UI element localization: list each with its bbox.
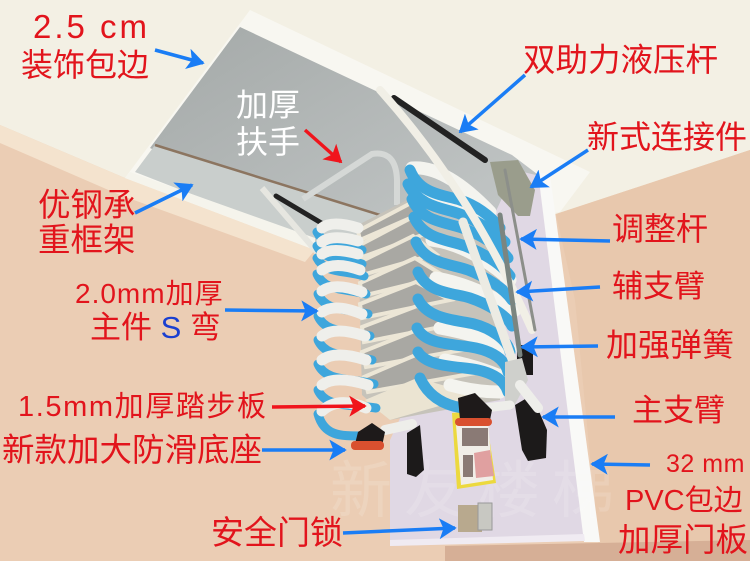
ladder treads [358, 198, 500, 420]
label: 2.5 cm trim [21, 8, 150, 83]
red arrows [272, 130, 365, 407]
label: tread: 1.5mm加厚踏步板 [18, 390, 268, 423]
label: S bend: 2.0mm加厚 [75, 278, 224, 309]
door lock [458, 503, 492, 532]
gas struts [276, 98, 485, 224]
watermark: 新友楼梯 [330, 457, 626, 526]
blue arrows [135, 50, 650, 533]
label: handrail [236, 87, 300, 160]
door panel [390, 170, 600, 546]
label: secondary arm: 辅支臂 [612, 269, 705, 304]
label: base: 新款加大防滑底座 [2, 432, 262, 468]
label: door panel [618, 450, 748, 558]
ceiling opening frame [125, 10, 590, 262]
label: lock: 安全门锁 [211, 514, 343, 551]
label: adjust rod: 调整杆 [612, 211, 708, 247]
left support arm [262, 188, 317, 252]
label: door panel: 32 mm [666, 450, 745, 478]
base plates and warning sign [407, 345, 547, 489]
label: main arm: 主支臂 [632, 393, 725, 428]
label: handrail: 加厚 [236, 87, 300, 123]
label: gas struts: 双助力液压杆 [523, 42, 718, 78]
label: frame [38, 187, 136, 258]
label: door panel: PVC包边 [625, 484, 743, 517]
label: handrail: 扶手 [236, 124, 300, 160]
main support arms and spring [380, 90, 538, 430]
label: frame: 优钢承 [38, 187, 136, 223]
label: spring: 加强弹簧 [606, 327, 734, 363]
label: S bend: 主件 S 弯 [90, 310, 221, 345]
anti-slip feet [351, 393, 492, 450]
label: connector: 新式连接件 [587, 119, 747, 155]
label: 2.5 cm trim: 2.5 cm [33, 8, 150, 45]
left white and blue S-arms [317, 224, 376, 436]
hinge bracket [490, 160, 535, 216]
label: frame: 重框架 [38, 222, 136, 258]
right white and blue S-arms [408, 168, 515, 408]
label: 2.5 cm trim: 装饰包边 [21, 47, 149, 83]
label: S bend [75, 278, 224, 345]
handrail [303, 154, 397, 205]
label: door panel: 加厚门板 [618, 522, 748, 558]
